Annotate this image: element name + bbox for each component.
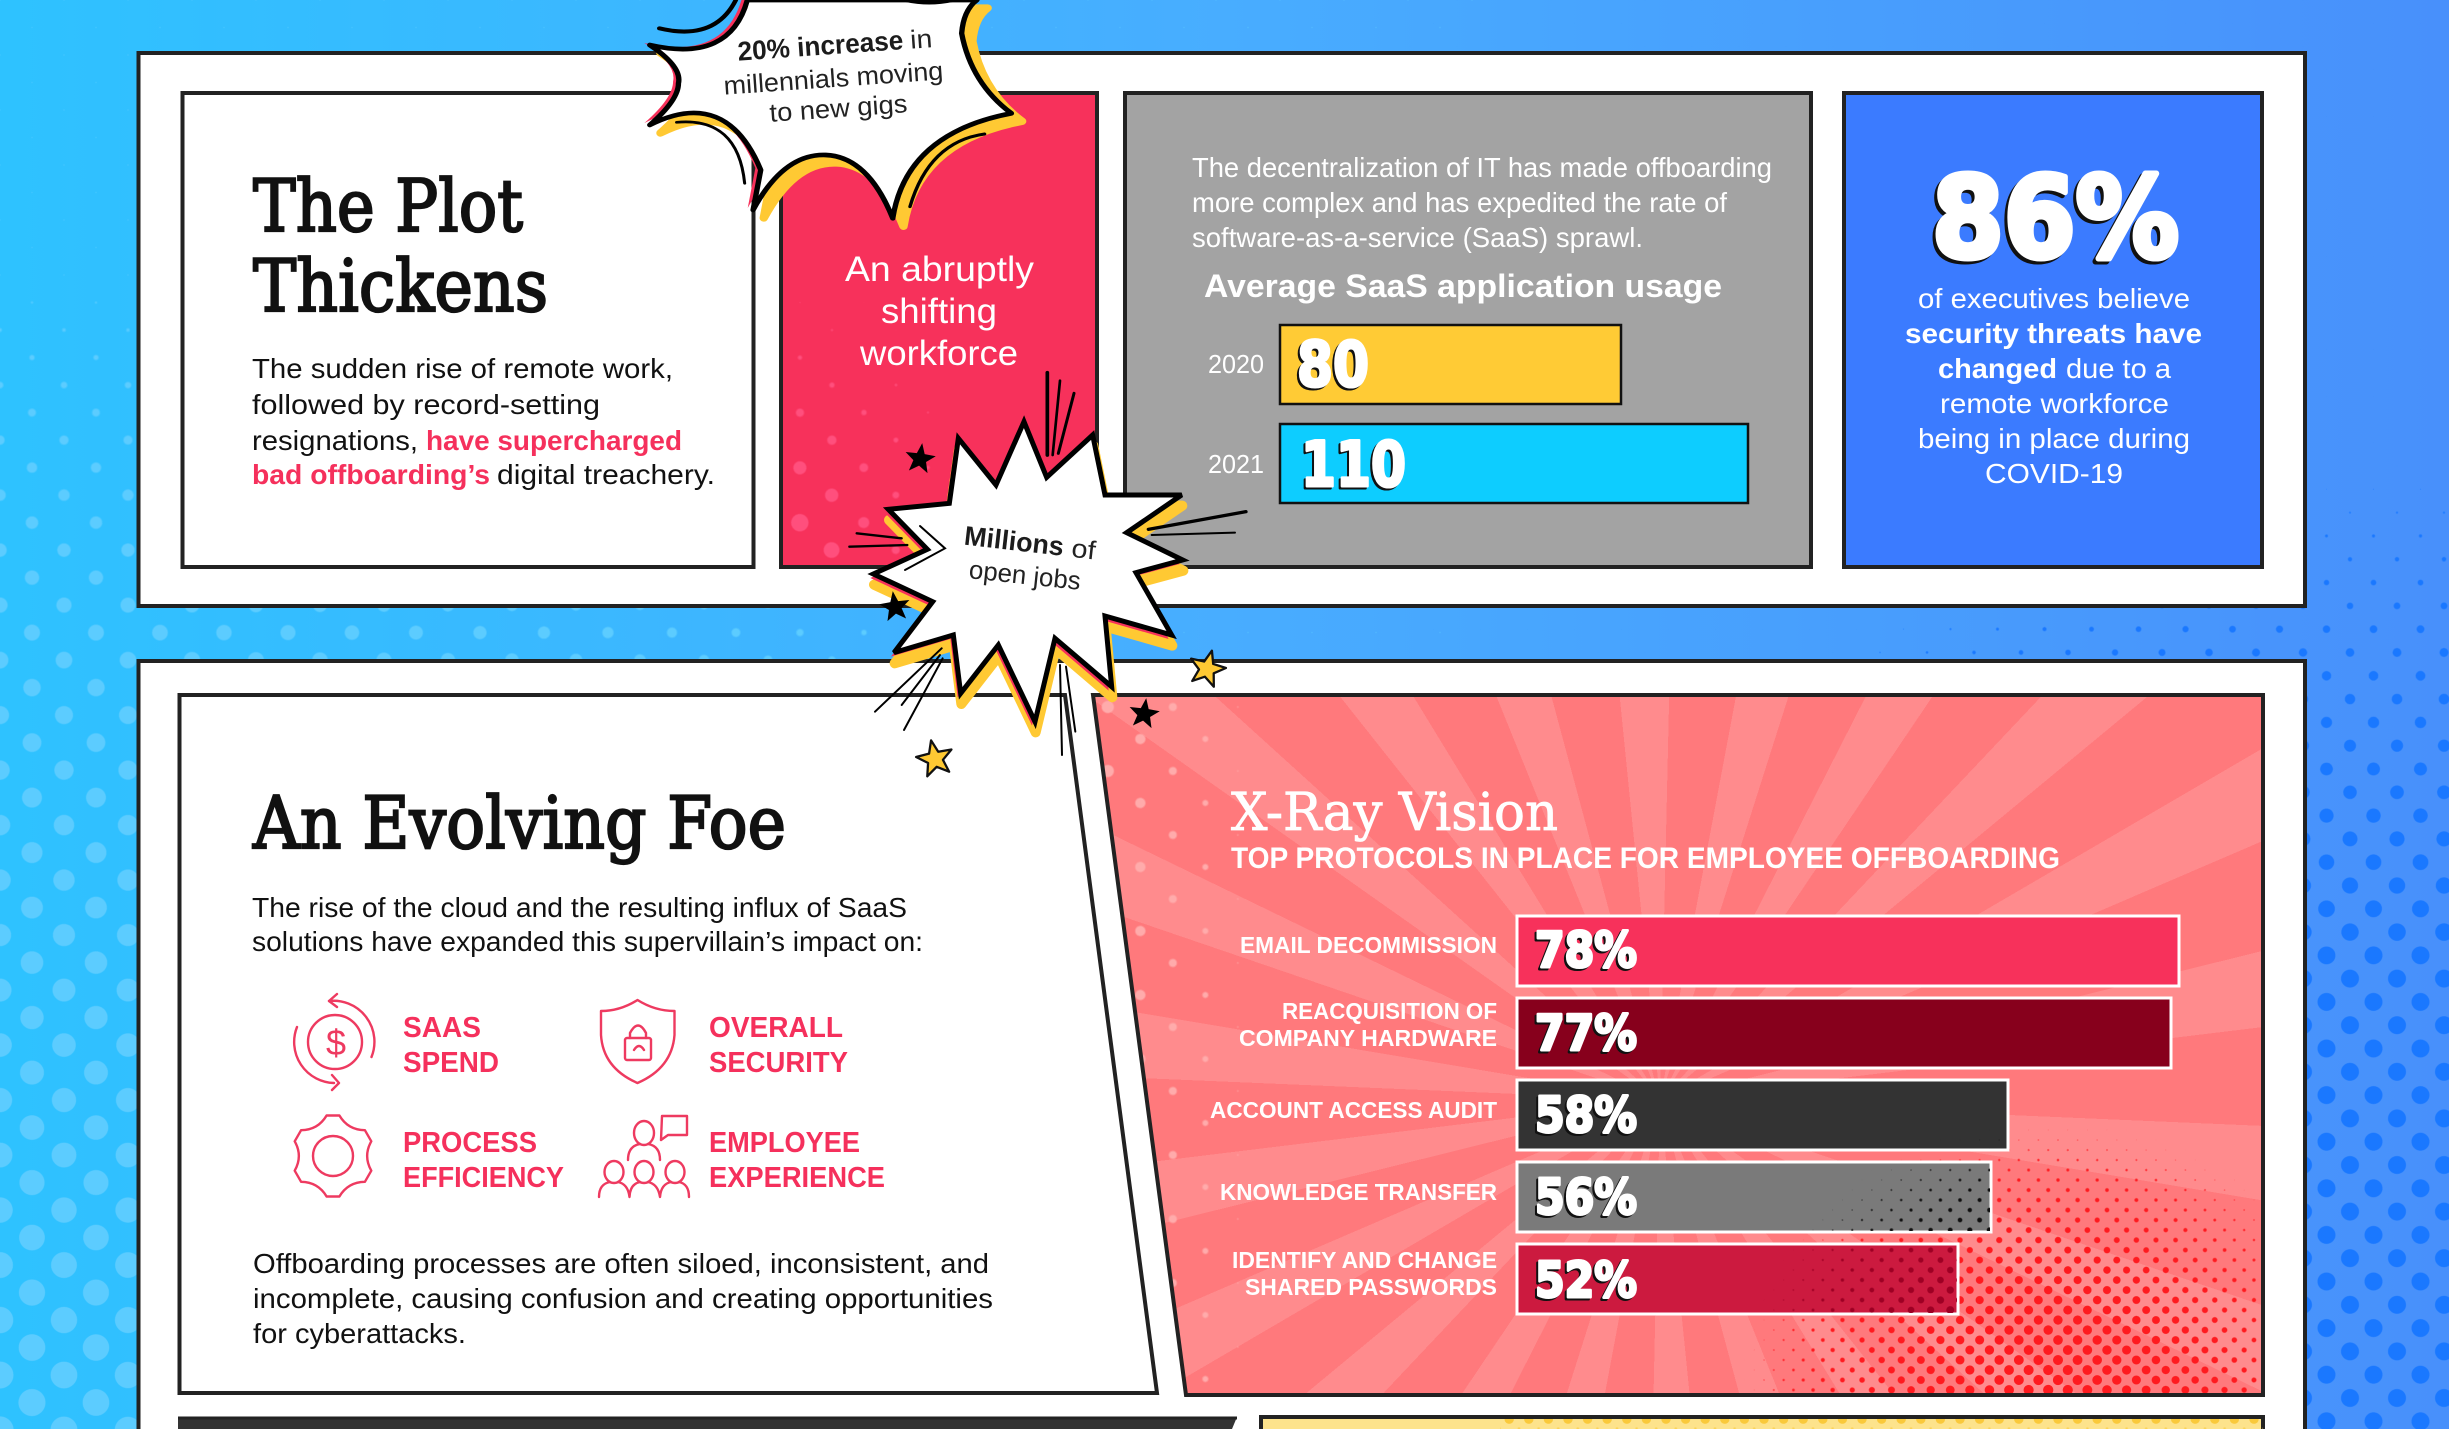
text block: abruptly shifting workforce: An abruptly [845,250,1035,289]
panel: dark bottom panel [178,1416,1237,1429]
text block: executives statement: COVID-19 [1985,458,2123,489]
icon: yellow star [913,737,956,778]
text block: offboarding processes: for cyberattacks. [253,1318,466,1349]
text block: executives statement: being in place during [1918,423,2190,454]
bar: company hardware 77%: COMPANY HARDWARE [1239,1025,1497,1051]
icon: SaaS spend: $ [326,1022,346,1063]
label: overall security: SECURITY [709,1047,848,1079]
bar: shared passwords 52% [1232,1244,1958,1314]
text block: offboarding processes: Offboarding processes are often siloed, inconsistent, and [253,1248,989,1279]
text block: remote work intro: followed by record-setting [252,389,600,420]
text block: abruptly shifting workforce: workforce [859,334,1018,373]
text block: remote work intro [252,353,715,490]
panel: The Plot Thickens [182,93,754,567]
text block: remote work intro: resignations, [252,425,418,456]
bar: shared passwords 52%: 52% [1535,1252,1637,1309]
bar: account access audit 58%: ACCOUNT ACCESS AUDIT [1210,1097,1497,1123]
bar: 2021: 110 [1301,428,1406,501]
heading: The Plot Thickens: The Plot [253,164,523,248]
panel: X-Ray Vision [1093,695,2264,1395]
subheading: top protocols: TOP PROTOCOLS IN PLACE FOR EMPLOYEE OFFBOARDING [1231,842,2060,875]
bar: company hardware 77%: 77% [1535,1005,1637,1062]
label: SaaS spend [403,1012,499,1079]
callout text: millions of open jobs: of [1070,533,1098,566]
bar: 2020: 2020 [1208,349,1264,379]
text block: executives statement: of executives believe [1918,283,2190,314]
label: employee experience: EMPLOYEE [709,1127,860,1159]
bar: 2020 [1208,325,1621,404]
panel: An Evolving Foe [180,695,1157,1393]
icon: black star [1127,696,1161,729]
bar: 2020: 80 [1297,328,1369,401]
text block: executives statement: remote workforce [1940,388,2169,419]
panel: lower section frame [138,661,2305,1429]
text block: offboarding processes: incomplete, causing confusion and creating opportunities [253,1283,993,1314]
text block: decentralization of IT [1192,152,1772,253]
bar: email decommission 78%: 78% [1535,922,1637,979]
text block: decentralization of IT: The decentralization of IT has made offboarding [1192,152,1772,183]
icon: overall security [601,1000,674,1083]
label: process efficiency [403,1127,564,1194]
bar: company hardware 77% [1239,998,2171,1068]
bar: email decommission 78% [1240,916,2179,986]
panel: 86 percent of executives [1844,93,2262,567]
bar: 2021 [1208,424,1748,503]
text block: abruptly shifting workforce [845,250,1035,373]
bar: shared passwords 52%: SHARED PASSWORDS [1245,1274,1497,1300]
bar: account access audit 58%: 58% [1535,1087,1637,1144]
bar: company hardware 77%: REACQUISITION OF [1282,998,1497,1024]
bar chart: SaaS usage [1208,325,1748,503]
text block: offboarding processes [253,1248,993,1349]
text block: remote work intro: have supercharged [426,425,682,456]
label: SaaS spend: SAAS [403,1012,481,1044]
callout text: 20% increase: in [909,23,933,55]
label: employee experience [709,1127,885,1194]
bar: knowledge transfer 56%: 56% [1535,1169,1637,1226]
callout text: 20% increase: 20% increase [737,25,904,67]
panel: top section frame [138,53,2305,606]
callout text: 20% increase: to new gigs [768,88,908,128]
callout text: millions of open jobs [963,521,1098,596]
bar: knowledge transfer 56%: KNOWLEDGE TRANSFER [1220,1179,1497,1205]
bar: email decommission 78%: EMAIL DECOMMISSION [1240,932,1497,958]
callout text: 20% increase [723,23,944,128]
text block: remote work intro: bad offboarding’s [252,459,490,490]
label: overall security [709,1012,848,1079]
bar: account access audit 58% [1210,1080,2008,1150]
label: SaaS spend: SPEND [403,1047,499,1079]
icon: black star [878,589,912,622]
icon: yellow star [1186,646,1229,689]
icon: employee experience [599,1116,689,1197]
panel: abruptly shifting workforce [781,93,1097,567]
callout text: millions of open jobs: Millions [963,521,1065,562]
text block: executives statement: changed [1938,353,2057,384]
label: employee experience: EXPERIENCE [709,1162,885,1194]
text block: rise of the cloud: solutions have expanded this supervillain’s impact on: [252,926,923,957]
text block: decentralization of IT: more complex and has expedited the rate of [1192,187,1727,218]
icon: process efficiency [295,1116,371,1196]
label: process efficiency: EFFICIENCY [403,1162,564,1194]
big number: 86%: 86% [1932,154,2179,284]
bar chart: offboarding protocols [1210,916,2179,1314]
bar: shared passwords 52%: IDENTIFY AND CHANGE [1232,1247,1497,1273]
text block: rise of the cloud [252,892,923,957]
text block: executives statement: due to a [2066,353,2171,384]
text block: abruptly shifting workforce: shifting [881,292,997,331]
chart title: Average SaaS application usage [1204,268,1722,304]
text block: remote work intro: digital treachery. [497,459,715,490]
callout text: millions of open jobs: open jobs [968,554,1082,596]
text block: remote work intro: The sudden rise of remote work, [252,353,673,384]
text block: executives statement: security threats have [1905,318,2202,349]
bar: knowledge transfer 56% [1220,1162,1991,1232]
text block: rise of the cloud: The rise of the cloud and the resulting influx of SaaS [252,892,907,923]
heading: An Evolving Foe: An Evolving Foe [252,781,786,865]
panel: SaaS application usage [1125,93,1811,567]
burst: 20% increase callout [644,0,1022,226]
label: overall security: OVERALL [709,1012,843,1044]
icon: SaaS spend [294,994,374,1090]
text block: executives statement [1905,283,2202,489]
bar: 2021: 2021 [1208,449,1264,479]
label: process efficiency: PROCESS [403,1127,537,1159]
heading: The Plot Thickens: Thickens [253,244,548,328]
callout text: 20% increase: millennials moving [723,55,944,101]
heading: X-Ray Vision: X-Ray Vision [1231,783,1558,843]
icon: black star [903,441,937,474]
heading: The Plot Thickens [253,164,548,328]
burst: millions of open jobs callout [849,373,1246,755]
panel: yellow bottom panel [1261,1417,2263,1429]
text block: decentralization of IT: software-as-a-service (SaaS) sprawl. [1192,222,1643,253]
